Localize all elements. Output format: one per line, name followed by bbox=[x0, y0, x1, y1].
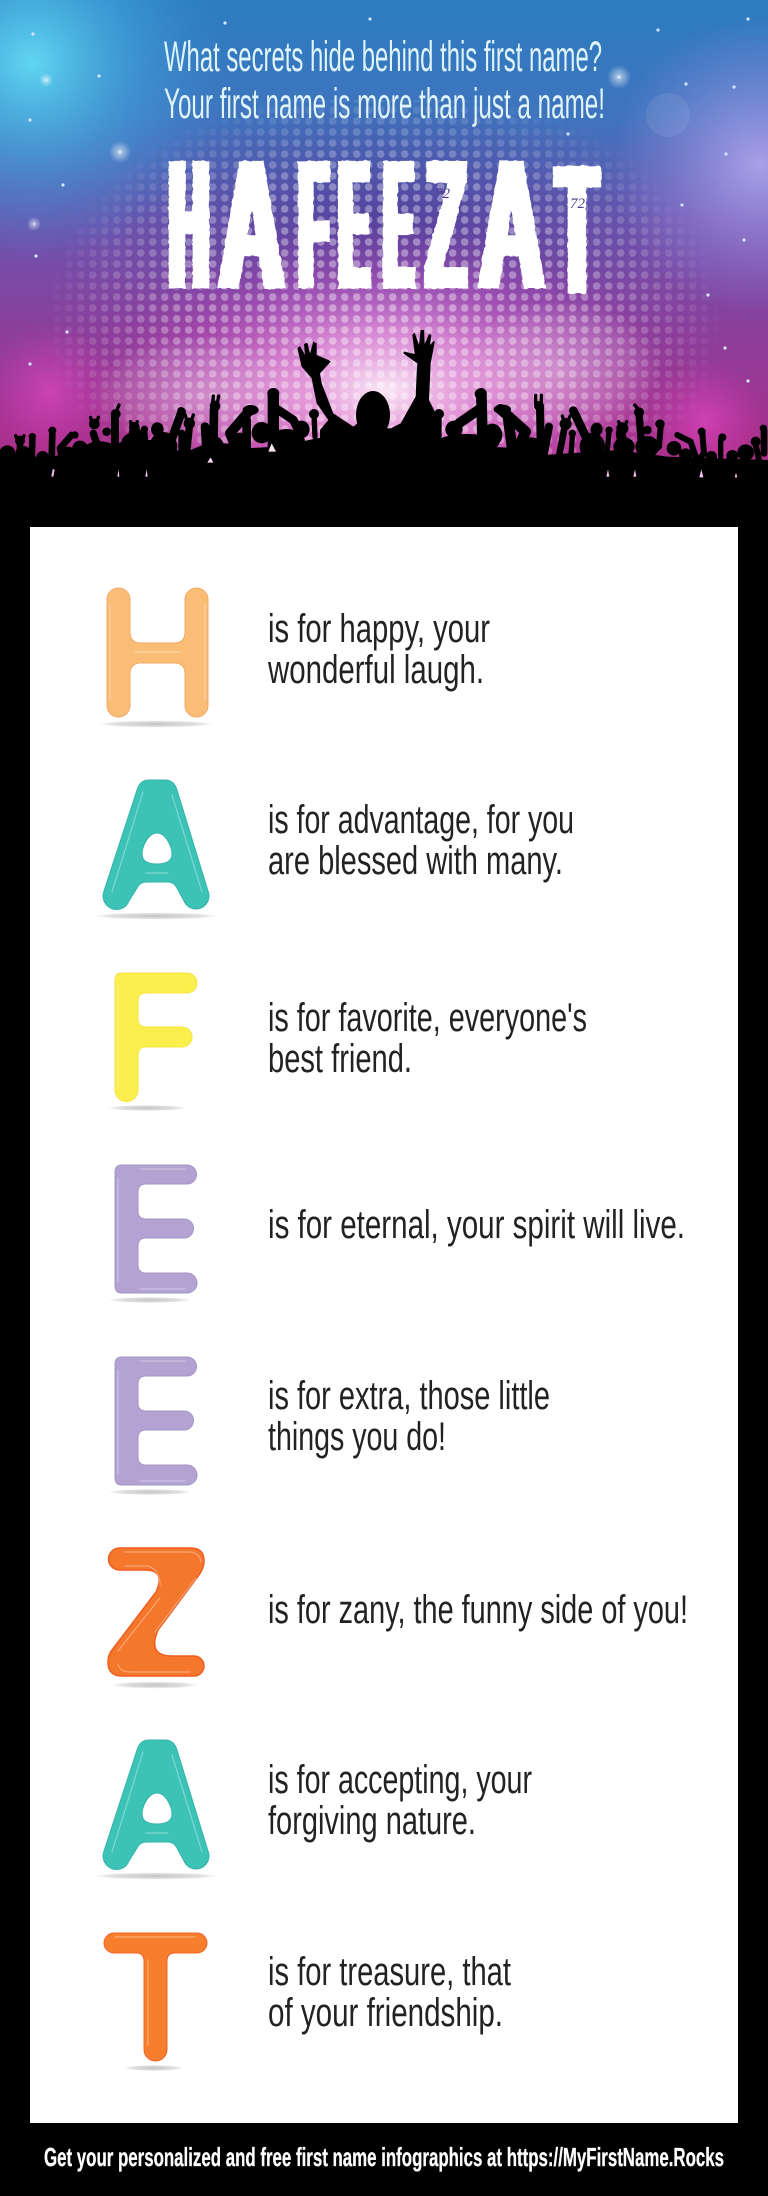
name title bbox=[170, 121, 598, 332]
row F bbox=[107, 973, 587, 1111]
crowd silhouette bbox=[0, 330, 768, 528]
name title: E bbox=[384, 121, 412, 327]
text: second E line: things you do! bbox=[268, 1415, 446, 1459]
text: second E line: is for extra, those little bbox=[268, 1374, 550, 1418]
text: second A line: forgiving nature. bbox=[268, 1799, 476, 1843]
text: F line bbox=[268, 996, 587, 1081]
text: second A line bbox=[268, 1758, 532, 1843]
icon: letter Z bbox=[108, 1548, 204, 1688]
text: A line: is for advantage, for you bbox=[268, 798, 574, 842]
row second E bbox=[108, 1357, 550, 1495]
header background bbox=[0, 0, 768, 460]
icon: letter A bbox=[94, 780, 218, 920]
text: H line: wonderful laugh. bbox=[267, 648, 484, 692]
text: A line: are blessed with many. bbox=[268, 839, 563, 883]
text: A line bbox=[268, 798, 574, 883]
icon: letter H bbox=[98, 588, 214, 728]
row Z bbox=[108, 1548, 688, 1688]
icon: letter F bbox=[107, 973, 197, 1111]
infographic canvas: T bbox=[556, 126, 598, 332]
icon: letter A bbox=[94, 1740, 218, 1880]
text: second E line bbox=[268, 1374, 550, 1459]
name title: 72 bbox=[435, 186, 450, 202]
text: F line: best friend. bbox=[268, 1037, 412, 1081]
icon: letter E bbox=[108, 1165, 197, 1303]
white letters panel bbox=[30, 527, 738, 2123]
name title: H bbox=[170, 121, 208, 327]
row H bbox=[98, 588, 490, 728]
name title: F bbox=[300, 121, 328, 327]
text: T line: of your friendship. bbox=[268, 1991, 503, 2035]
icon: letter E bbox=[108, 1357, 197, 1495]
text: H line bbox=[267, 607, 490, 692]
icon: letter T bbox=[104, 1933, 207, 2071]
header tagline bbox=[164, 33, 605, 128]
text: T line bbox=[268, 1950, 511, 2035]
text: T line: is for treasure, that bbox=[268, 1950, 511, 1994]
row second A bbox=[94, 1740, 532, 1880]
name title: A bbox=[480, 121, 544, 327]
text: F line: is for favorite, everyone's bbox=[268, 996, 587, 1040]
name title: E bbox=[340, 121, 368, 327]
name title: 72 bbox=[570, 196, 586, 212]
text: second A line: is for accepting, your bbox=[268, 1758, 532, 1802]
name title: A bbox=[220, 121, 284, 327]
text: H line: is for happy, your bbox=[268, 607, 490, 651]
name title: Z bbox=[426, 121, 466, 327]
row E bbox=[108, 1165, 685, 1303]
row A bbox=[94, 780, 574, 920]
row T bbox=[104, 1933, 511, 2071]
